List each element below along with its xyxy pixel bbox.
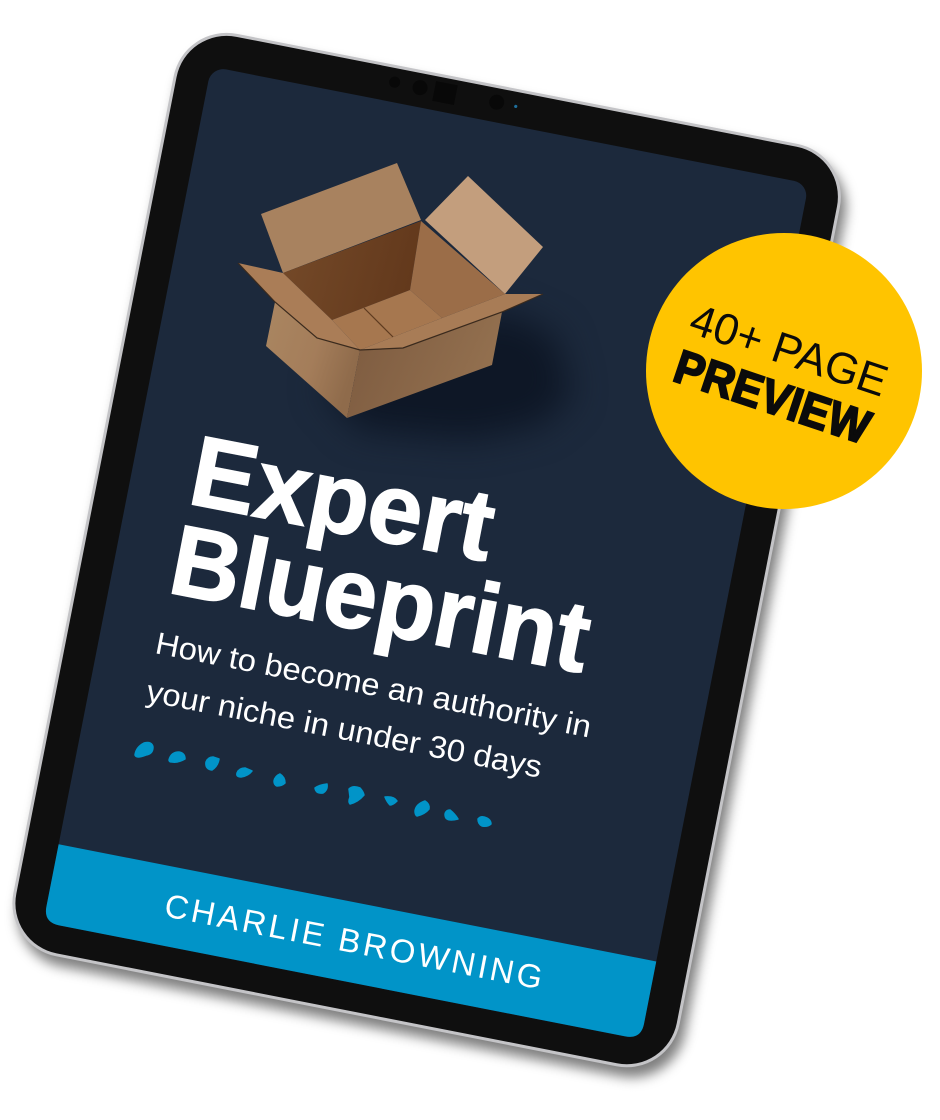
author name: CHARLIE BROWNING: [162, 887, 546, 996]
cardboard box illustration: [238, 163, 543, 418]
back right flap: [425, 176, 543, 294]
tablet screen: [43, 67, 809, 1039]
dot 11: [478, 817, 491, 826]
inner back wall: [283, 221, 421, 320]
badge line 2: PREVIEW: [668, 339, 878, 454]
front camera: [488, 93, 506, 111]
left front flap: [238, 263, 360, 350]
box floor: [332, 290, 442, 350]
back left flap: [261, 163, 421, 273]
dot 8: [385, 797, 397, 805]
dot 3: [206, 757, 219, 770]
dot 4: [237, 768, 252, 777]
dot 2: [169, 752, 185, 762]
camera cluster: [387, 72, 519, 117]
subtitle: [144, 626, 594, 785]
right front flap: [360, 294, 543, 350]
corrugated edges: [238, 263, 543, 350]
title line 1: Expert: [182, 415, 504, 583]
badge line 1: 40+ PAGE: [684, 295, 894, 407]
inner right wall: [410, 221, 505, 318]
subtitle line 1: How to become an authority in: [153, 626, 594, 744]
sensor square: [432, 81, 458, 105]
preview badge: [646, 233, 922, 509]
dot 10: [445, 810, 458, 820]
box shadow: [320, 310, 572, 440]
sensor 1: [388, 76, 401, 89]
dot 1: [135, 742, 153, 757]
blue author band: [43, 844, 656, 1039]
floor crease: [364, 308, 393, 337]
title line 2: Blueprint: [162, 504, 599, 694]
badge circle: [646, 233, 922, 509]
camera indicator: [514, 105, 518, 108]
dot 9: [415, 801, 429, 816]
front left side: [266, 302, 360, 418]
dotted blue line: [135, 742, 491, 826]
sensor 2: [411, 79, 429, 96]
front right side: [347, 312, 502, 418]
title: [162, 415, 599, 694]
dot 6: [315, 784, 327, 793]
subtitle line 2: your niche in under 30 days: [144, 674, 545, 785]
dot 7: [349, 787, 364, 804]
dot 5: [274, 774, 285, 786]
